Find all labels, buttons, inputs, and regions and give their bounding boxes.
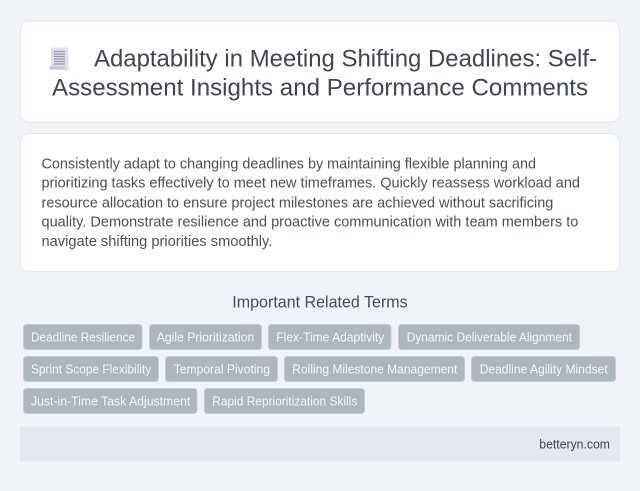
title line 2: Assessment Insights and Performance Comments bbox=[52, 74, 588, 101]
tag: Agile Prioritization: Agile Prioritization bbox=[157, 330, 254, 345]
tag: Temporal Pivoting: Temporal Pivoting bbox=[174, 362, 270, 377]
tag: Dynamic Deliverable Alignment bbox=[398, 324, 580, 350]
tag: Rolling Milestone Management: Rolling Milestone Management bbox=[292, 362, 458, 377]
heading: important related terms: Important Related Terms bbox=[232, 293, 408, 311]
title line 1: Adaptability in Meeting Shifting Deadlines: Self- bbox=[94, 46, 597, 73]
tag: Agile Prioritization bbox=[150, 324, 262, 350]
tag: Rolling Milestone Management bbox=[284, 356, 464, 382]
tag: Rapid Reprioritization Skills: Rapid Reprioritization Skills bbox=[212, 394, 357, 409]
tags bbox=[24, 324, 616, 414]
tag: Flex-Time Adaptivity bbox=[268, 324, 391, 350]
tag: Flex-Time Adaptivity: Flex-Time Adaptivity bbox=[276, 330, 385, 345]
footer bbox=[20, 427, 620, 461]
tag: Sprint Scope Flexibility: Sprint Scope Flexibility bbox=[31, 362, 152, 377]
body text line 5: navigate shifting priorities smoothly. bbox=[42, 234, 272, 250]
tag: Sprint Scope Flexibility bbox=[24, 356, 158, 382]
tag: Deadline Agility Mindset: Deadline Agility Mindset bbox=[480, 362, 608, 377]
tag: Deadline Agility Mindset bbox=[472, 356, 616, 382]
body text line 2: prioritizing tasks effectively to meet new timeframes. Quickly reassess workload and bbox=[42, 176, 580, 192]
tag: Rapid Reprioritization Skills bbox=[204, 388, 364, 414]
tag: Just-in-Time Task Adjustment bbox=[24, 388, 197, 414]
panel: title bbox=[20, 21, 620, 122]
tag: Temporal Pivoting bbox=[166, 356, 278, 382]
tag: Deadline Resilience bbox=[24, 324, 142, 350]
body text line 4: quality. Demonstrate resilience and proactive communication with team members to bbox=[42, 214, 578, 230]
footer source text: betteryn.com bbox=[539, 436, 610, 451]
tag: Just-in-Time Task Adjustment: Just-in-Time Task Adjustment bbox=[31, 394, 191, 409]
tag: Deadline Resilience: Deadline Resilience bbox=[31, 330, 135, 345]
body text line 3: resource allocation to ensure project milestones are achieved without sacrificing bbox=[42, 195, 553, 211]
body text line 1: Consistently adapt to changing deadlines by maintaining flexible planning and bbox=[42, 156, 536, 172]
panel: description bbox=[20, 134, 620, 272]
icon: paper scroll bbox=[49, 48, 68, 70]
tag: Dynamic Deliverable Alignment: Dynamic Deliverable Alignment bbox=[407, 330, 572, 345]
